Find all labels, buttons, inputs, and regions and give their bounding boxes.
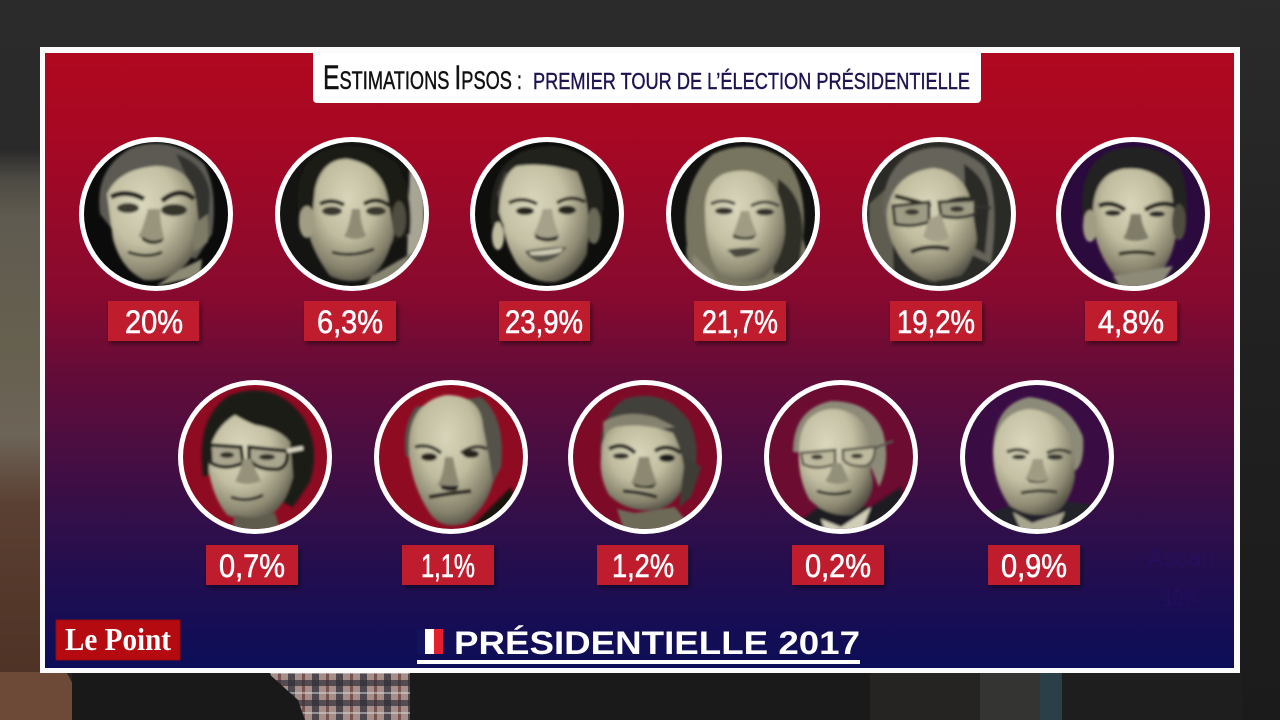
- candidate portrait 10: [764, 380, 918, 534]
- faint watermark label: Ascan: [1147, 545, 1215, 572]
- score label 4,8%: 4,8%: [1098, 304, 1164, 340]
- score label 0,7%: 0,7%: [219, 548, 285, 584]
- score label 1,1%: 1,1%: [421, 548, 475, 584]
- logo: Le Point: Le Point: [65, 621, 171, 657]
- candidate portrait 8: [374, 380, 528, 534]
- score label 20%: 20%: [125, 304, 183, 340]
- faint watermark label: [1147, 545, 1215, 612]
- candidate portrait 3: [470, 137, 624, 291]
- candidate portrait 11: [960, 380, 1114, 534]
- candidate portrait 5: [862, 137, 1016, 291]
- candidate portrait 4: [666, 137, 820, 294]
- candidate portrait 2: [275, 137, 429, 291]
- score label 21,7%: 21,7%: [702, 304, 778, 340]
- title: ESTIMATIONS IPSOS :: [323, 59, 522, 97]
- footer heading: Présidentielle 2017: PRÉSIDENTIELLE 2017: [454, 625, 860, 661]
- icon: French flag: [417, 629, 443, 654]
- faint watermark label: 10%: [1163, 585, 1199, 612]
- score label 0,9%: 0,9%: [1001, 548, 1067, 584]
- candidate portrait 6: [1056, 137, 1210, 291]
- title: PREMIER TOUR DE L’ÉLECTION PRÉSIDENTIELLE: [533, 68, 970, 94]
- score label 0,2%: 0,2%: [805, 548, 871, 584]
- score label 23,9%: 23,9%: [505, 304, 583, 340]
- score label 19,2%: 19,2%: [897, 304, 975, 340]
- score label 20%: [108, 301, 199, 341]
- candidate portrait 9: [568, 380, 722, 534]
- score label 1,2%: 1,2%: [612, 548, 674, 584]
- score label 6,3%: 6,3%: [317, 304, 383, 340]
- candidate portrait 1: [79, 137, 233, 291]
- title: [313, 53, 981, 103]
- candidate portrait 7: [178, 380, 332, 534]
